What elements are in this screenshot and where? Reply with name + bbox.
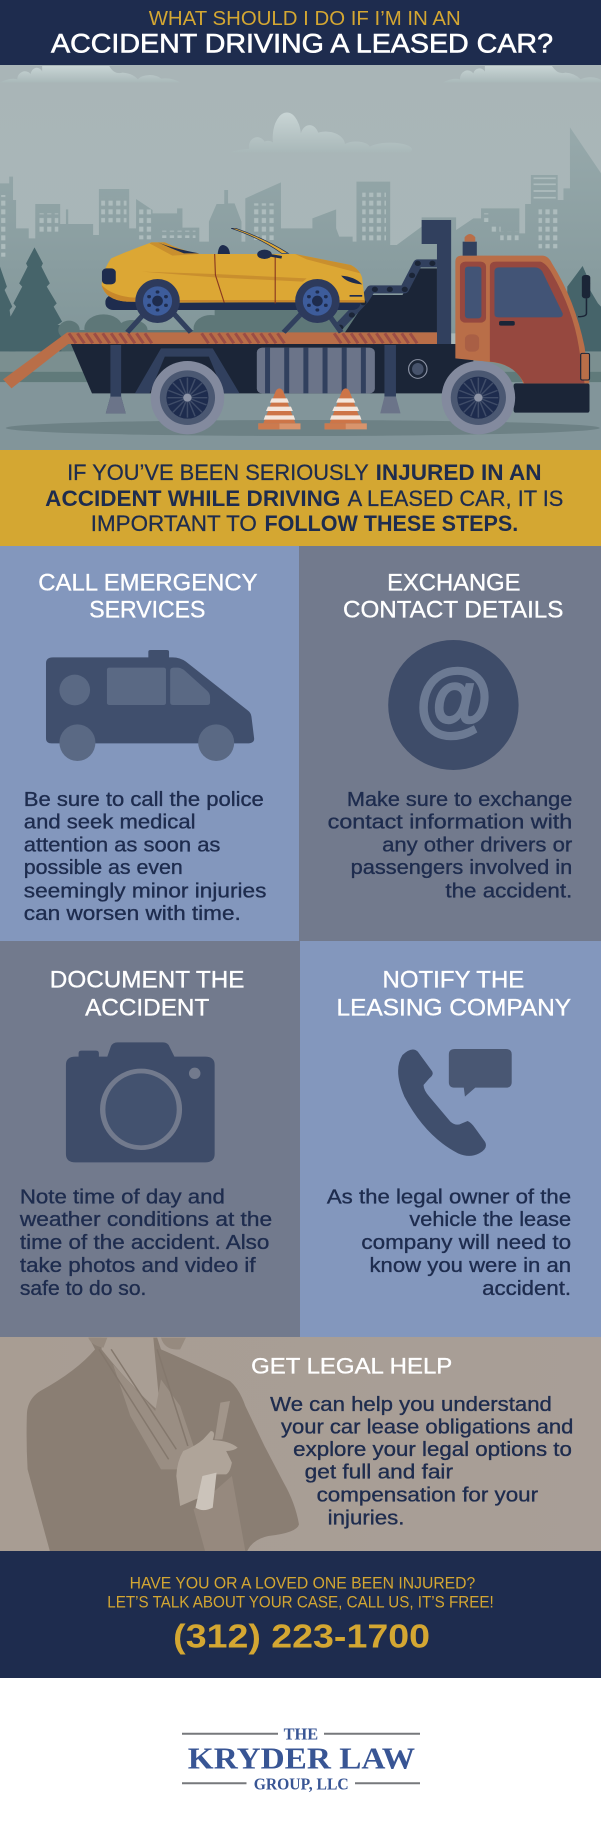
body text: attention as soon as [24, 834, 220, 856]
body text [270, 1394, 573, 1530]
body text: know you were in an [370, 1255, 571, 1277]
heading: CALL EMERGENCY [38, 570, 257, 597]
header band [0, 0, 601, 65]
heading: DOCUMENT THE [50, 967, 244, 994]
phone number: (312) 223-1700 [173, 1618, 430, 1655]
heading [50, 967, 244, 1022]
logo: The Kryder Law Group, LLC [182, 1724, 420, 1793]
heading [38, 570, 257, 624]
body text: get full and fair [305, 1462, 453, 1484]
heading: EXCHANGE [387, 570, 520, 597]
clouds [0, 66, 601, 152]
body text: the accident. [445, 880, 572, 902]
title line 1: WHAT SHOULD I DO IF I’M IN AN [149, 7, 461, 30]
body text: We can help you understand [270, 1394, 552, 1416]
intro line 1: INJURED IN AN [376, 460, 542, 485]
body text: safe to do so. [20, 1278, 146, 1300]
trees and bushes [0, 247, 601, 352]
body text: weather conditions at the [19, 1209, 272, 1231]
heading: GET LEGAL HELP [251, 1353, 452, 1378]
intro line 2: ACCIDENT WHILE DRIVING [45, 486, 340, 511]
call to action text: LET’S TALK ABOUT YOUR CASE, CALL US, IT’S FREE! [107, 1594, 494, 1612]
body text: explore your legal options to [293, 1439, 572, 1461]
panel: exchange contact details [299, 546, 601, 941]
intro band [0, 450, 601, 546]
logo: The Kryder Law Group, LLC: GROUP, LLC [254, 1774, 349, 1793]
body text: seemingly minor injuries [24, 880, 266, 902]
body text: company will need to [361, 1232, 571, 1254]
truck cab [455, 234, 590, 413]
heading [336, 967, 571, 1022]
panel: call emergency services [0, 546, 299, 941]
call to action band [0, 1551, 601, 1678]
logo: The Kryder Law Group, LLC: KRYDER LAW [188, 1741, 415, 1776]
icon: phone and speech bubble [398, 1049, 512, 1156]
intro line 1 [67, 460, 542, 485]
body text [19, 1186, 272, 1300]
traffic cones [258, 388, 367, 429]
intro line 2 [45, 486, 563, 511]
panel: get legal help [0, 1337, 601, 1552]
intro line 3: FOLLOW THESE STEPS. [264, 511, 518, 536]
intro line 1: IF YOU’VE BEEN SERIOUSLY [67, 460, 369, 485]
icon: at sign [388, 640, 519, 770]
heading: NOTIFY THE [382, 967, 524, 994]
body text: time of the accident. Also [20, 1232, 269, 1254]
yellow convertible car [102, 228, 365, 332]
panel: notify the leasing company [300, 941, 601, 1337]
intro line 3 [91, 511, 518, 536]
heading: SERVICES [89, 597, 205, 624]
body text: possible as even [24, 857, 183, 879]
icon: at sign: @ [416, 653, 492, 744]
icon: camera [66, 1042, 215, 1162]
body text: passengers involved in [351, 857, 572, 879]
heading [343, 570, 563, 624]
truck wheels [151, 361, 515, 434]
rear boom structure [337, 220, 451, 344]
body text [24, 789, 266, 925]
body text [328, 789, 573, 902]
call to action text [107, 1574, 494, 1612]
body text [327, 1186, 571, 1300]
body text: any other drivers or [382, 834, 573, 856]
panel: document the accident [0, 941, 300, 1337]
heading: LEASING COMPANY [336, 995, 571, 1022]
illustration: tow truck carrying a yellow car [0, 65, 601, 450]
title line 2: ACCIDENT DRIVING A LEASED CAR? [51, 28, 553, 58]
body text: and seek medical [24, 811, 195, 833]
body text: take photos and video if [20, 1255, 256, 1277]
body text: contact information with [328, 811, 572, 833]
heading: CONTACT DETAILS [343, 597, 563, 624]
body text: can worsen with time. [24, 903, 241, 925]
intro line 2: A LEASED CAR, IT IS [348, 486, 563, 511]
body text: As the legal owner of the [327, 1186, 571, 1208]
body text: compensation for your [317, 1485, 538, 1507]
heading: ACCIDENT [85, 995, 210, 1022]
body text: your car lease obligations and [281, 1417, 573, 1439]
body text: Make sure to exchange [347, 789, 572, 811]
body text: injuries. [328, 1508, 404, 1530]
icon: emergency van [46, 650, 254, 761]
body text: Be sure to call the police [24, 789, 264, 811]
ground and road [0, 352, 601, 450]
intro line 3: IMPORTANT TO [91, 511, 257, 536]
flatbed deck with hazard stripes [3, 332, 437, 388]
illustration: attorney in a suit [27, 1338, 299, 1551]
call to action text: HAVE YOU OR A LOVED ONE BEEN INJURED? [130, 1574, 475, 1592]
truck chassis [71, 344, 516, 413]
body text: vehicle the lease [409, 1209, 571, 1231]
body text: Note time of day and [20, 1186, 225, 1208]
logo: The Kryder Law Group, LLC: THE [284, 1724, 318, 1743]
body text: accident. [482, 1278, 571, 1300]
skyline [0, 127, 601, 333]
